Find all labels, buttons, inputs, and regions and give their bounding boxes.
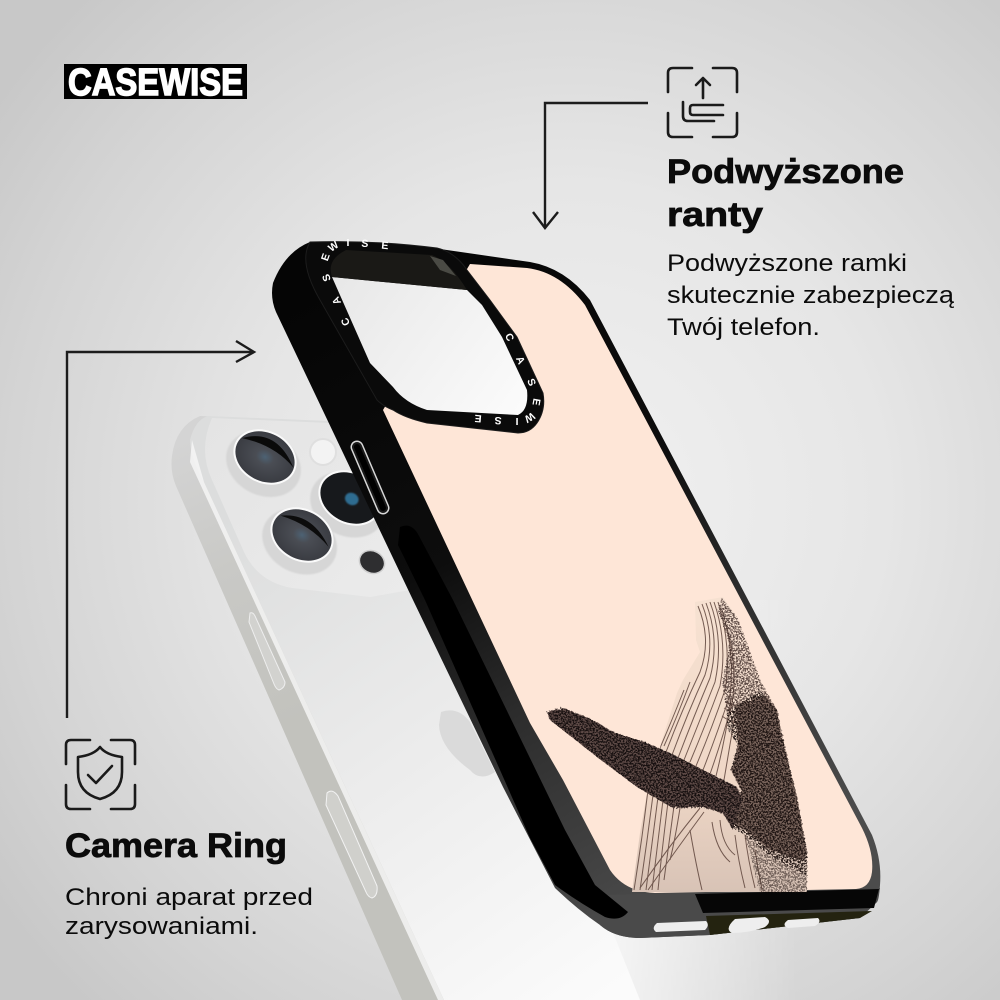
ring lettering <box>319 237 543 427</box>
whale illustration <box>547 597 807 892</box>
phone back lower fade <box>614 933 743 1000</box>
icon: shield check <box>66 740 135 809</box>
ring lettering: E <box>474 412 482 424</box>
ring lettering: A <box>330 294 344 307</box>
phone side band <box>172 416 560 1000</box>
text: camera ring description: zarysowaniami. <box>65 913 258 940</box>
arrow: camera ring <box>67 341 254 718</box>
ring lettering: E <box>319 252 333 263</box>
case bottom edge gray <box>600 888 880 938</box>
text: camera ring description: Chroni aparat przed <box>65 884 313 911</box>
whale belly grooves <box>634 602 762 890</box>
arrow: raised edges <box>533 103 648 228</box>
ring lettering: W <box>522 409 537 425</box>
whale dark flank base <box>731 695 807 860</box>
text: raised edges description <box>667 250 955 341</box>
whale flipper shading <box>547 708 742 830</box>
pink back panel <box>383 264 872 893</box>
black phone case <box>272 237 880 938</box>
whale speckled snout <box>718 598 777 713</box>
phone back <box>190 416 640 1000</box>
camera lens top <box>214 417 313 510</box>
lidar sensor <box>355 546 389 578</box>
ring lettering: C <box>502 331 516 344</box>
heading: Podwyższone ranty: ranty <box>667 196 763 234</box>
case body <box>272 242 880 938</box>
text: raised edges description: Podwyższone ramki <box>667 250 907 277</box>
text: camera ring description <box>65 884 313 940</box>
ring lettering: E <box>381 240 389 252</box>
camera lens bottom <box>251 494 350 587</box>
whale flipper base <box>547 708 742 830</box>
apple logo <box>439 710 495 777</box>
ring lettering: W <box>326 239 341 255</box>
side button on case <box>357 447 383 508</box>
ring lettering: I <box>347 237 350 249</box>
camera ring frame <box>306 242 544 433</box>
bottom olive band <box>706 911 872 935</box>
bottom black band <box>695 889 879 913</box>
ring lettering: C <box>339 315 353 328</box>
black side slit <box>398 526 628 919</box>
ring lettering: E <box>529 397 543 406</box>
side button upper <box>249 613 285 690</box>
ring lettering: I <box>515 415 518 427</box>
side button lower <box>326 791 377 898</box>
heading: Podwyższone ranty <box>667 153 904 234</box>
ring lettering: S <box>524 377 538 388</box>
text: raised edges description: skutecznie zabezpieczą <box>667 282 955 309</box>
flash <box>310 439 336 465</box>
camera lens right <box>299 457 398 550</box>
heading: Camera Ring: Camera Ring <box>65 827 287 865</box>
icon: raised edges <box>668 68 737 137</box>
heading: Podwyższone ranty: Podwyższone <box>667 153 904 191</box>
whale dark flank <box>727 690 807 875</box>
logo: CASEWISE: CASEWISE <box>68 62 243 104</box>
ring lettering: S <box>320 272 334 283</box>
ring lettering: S <box>494 414 502 426</box>
camera window <box>332 277 527 415</box>
whale lower right shading <box>745 835 807 892</box>
charging port cutouts <box>654 917 819 933</box>
white phone behind case <box>172 416 800 1000</box>
ring lettering: A <box>513 354 527 367</box>
whale body <box>632 597 807 892</box>
text: raised edges description: Twój telefon. <box>667 314 820 341</box>
inner bevel <box>331 250 467 290</box>
ring lettering: S <box>361 238 369 250</box>
